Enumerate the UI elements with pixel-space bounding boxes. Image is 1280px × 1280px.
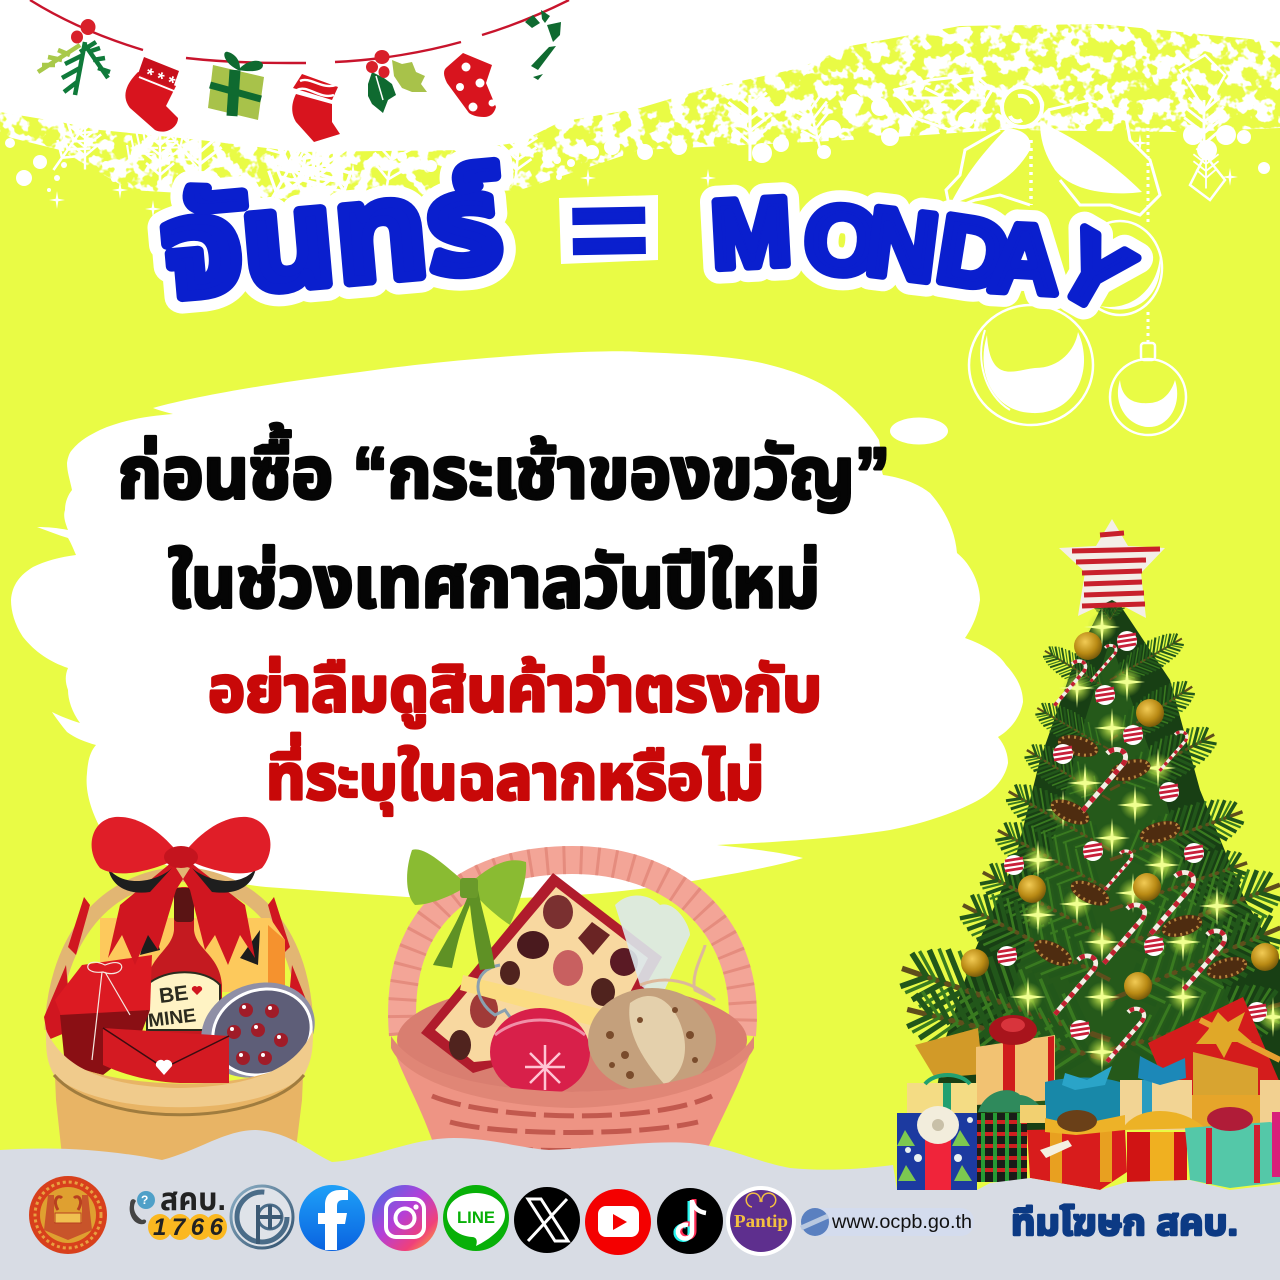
Christmas tree [889,519,1280,1130]
red box gold band [1122,1111,1205,1182]
footer: hotline logo: 1766 [153,1214,224,1241]
title: MONDAY: MONDAY [708,178,1148,334]
ornament: large bauble [969,305,1093,425]
footer: hotline logo: ? [141,1193,148,1207]
grey snow ground [0,1130,1280,1280]
basket weave body [391,1040,754,1165]
footer: LINE icon [443,1185,509,1251]
striped baubles [997,631,1267,1040]
envelope [103,1028,229,1083]
icon: red stocking 2 [292,74,340,142]
icon: red stocking 1: *** [143,64,178,93]
gift basket: pink [391,849,754,1165]
heading line 2: ในช่วงเทศกาลวันปีใหม่ [168,543,820,623]
pine cones [1030,731,1250,983]
basket body [54,1052,304,1165]
tree foliage [889,582,1280,1130]
green bow [407,849,526,970]
icon: starred stocking [444,53,496,117]
title: Thai word: จันทร์ [155,146,507,327]
candy canes [1054,645,1225,1062]
cookie bag [588,988,716,1092]
teal box [1185,1107,1280,1188]
footer: TikTok icon [657,1188,723,1254]
cream box left [907,1075,977,1115]
wine bottle: MINE [147,1005,197,1032]
footer: website pill: www.ocpb.go.th [831,1212,972,1233]
footer: hotline logo [130,1181,227,1241]
wine bottle [146,887,222,1040]
clear bag top [615,896,690,1000]
footer: hotline logo: สคบ. [160,1181,226,1217]
icon: candy cane [525,10,561,80]
icon: mistletoe [38,19,110,95]
red message line 1: อย่าลืมดูสินค้าว่าตรงกับ [208,655,822,728]
footer: LINE icon: LINE [457,1208,495,1227]
footer: X icon [514,1187,580,1253]
heading line 1: ก่อนซื้อ “กระเช้าของขวัญ” [118,423,890,514]
cream and blue box [1120,1056,1192,1130]
big red box [1148,997,1280,1120]
gift pile [897,997,1280,1190]
footer: YouTube icon [585,1189,651,1255]
cream box with red bow [976,1015,1055,1105]
chocolate tin [188,967,328,1093]
ornament: small bauble [1110,343,1186,435]
title: MONDAY: MONDAY [708,178,1148,334]
garland string [30,0,569,63]
star topper [1059,519,1165,618]
title: Thai word: จันทร์ [155,146,507,327]
footer: Instagram icon [372,1185,438,1251]
footer: website pill [801,1208,974,1236]
footer: Facebook icon [299,1185,365,1251]
gold box right [1180,1052,1280,1130]
green bow plaid box [975,1090,1046,1182]
speech bubble [11,351,1023,899]
footer: Pantip icon [726,1186,796,1256]
pink ornament [490,1008,590,1096]
tree lights [1010,607,1280,1072]
holly decoration [895,55,1225,345]
gold box back left [915,1028,983,1078]
red bow [92,817,270,965]
patterned blue box [897,1106,977,1190]
footer: Pantip icon: Pantip [734,1211,788,1231]
icon: red stocking 1 [125,57,179,132]
footer: team credit: ทีมโฆษก สคบ. [1011,1202,1238,1243]
red gift box [55,955,152,1075]
footer: government seal [29,1176,107,1254]
chocolate box [421,873,662,1073]
title: equals sign: = [569,166,649,293]
icon: green gift [208,52,264,120]
footer: OCPB emblem [231,1186,293,1248]
snow dots and sparkles [5,94,1270,218]
wine bottle: BE [158,982,190,1008]
red message line 2: ที่ระบุในฉลากหรือไม่ [266,733,764,815]
icon: holly sprig [366,50,427,113]
gold baubles [961,632,1279,1000]
gift basket: red [44,817,328,1165]
ornament: hidden ball behind title [1078,221,1162,315]
title: equals sign [559,166,658,293]
blue box [1045,1066,1120,1130]
red box with gold ribbon [1027,1110,1127,1190]
snow frost band [0,0,1280,222]
